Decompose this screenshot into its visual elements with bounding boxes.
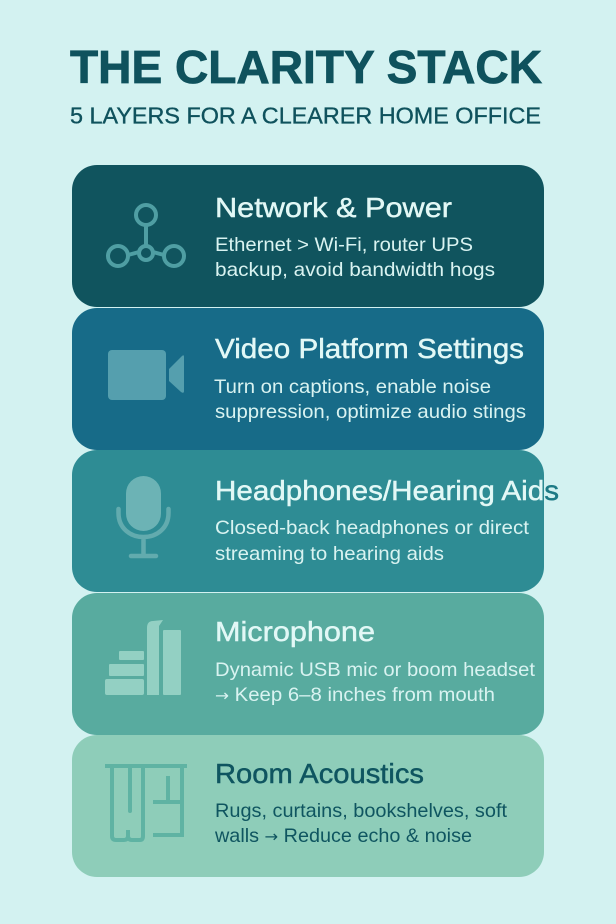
panel: headphones and hearing aids bbox=[72, 450, 559, 592]
description: room acoustics bbox=[214, 800, 508, 847]
description: room acoustics: walls → Reduce echo & noise bbox=[214, 825, 472, 847]
description: microphone: Dynamic USB mic or boom headset bbox=[215, 659, 536, 681]
icon: network nodes bbox=[108, 205, 184, 266]
description: headphones and hearing aids: Closed-back headphones or direct bbox=[215, 517, 530, 539]
heading: headphones and hearing aids: Headphones/Hearing Aids bbox=[215, 475, 559, 506]
icon: room layout bbox=[105, 766, 187, 840]
description: headphones and hearing aids: streaming to hearing aids bbox=[215, 543, 444, 565]
description: network and power: Ethernet > Wi-Fi, router UPS bbox=[215, 234, 473, 256]
description: microphone: → Keep 6–8 inches from mouth bbox=[215, 684, 495, 706]
description: video platform settings: suppression, optimize audio stings bbox=[215, 401, 526, 423]
panel: network and power bbox=[72, 165, 544, 307]
icon: video camera bbox=[108, 350, 184, 400]
heading: network and power: Network & Power bbox=[215, 192, 452, 223]
heading: room acoustics: Room Acoustics bbox=[215, 758, 424, 789]
heading: video platform settings: Video Platform Settings bbox=[215, 333, 524, 364]
icon: books on a shelf bbox=[105, 620, 181, 695]
panel: microphone bbox=[72, 593, 544, 735]
description: video platform settings: Turn on captions, enable noise bbox=[214, 376, 491, 398]
heading: microphone: Microphone bbox=[215, 616, 375, 647]
panel: video platform settings bbox=[72, 308, 544, 450]
description: network and power: backup, avoid bandwidth hogs bbox=[215, 259, 495, 281]
heading: headphones and hearing aids: Headphones/Hearing Aids bbox=[215, 475, 559, 506]
icon: microphone bbox=[118, 476, 168, 556]
description: video platform settings bbox=[214, 376, 526, 423]
description: headphones and hearing aids bbox=[215, 517, 530, 565]
description: microphone bbox=[215, 659, 536, 706]
subtitle: 5 LAYERS FOR A CLEARER HOME OFFICE bbox=[70, 102, 541, 128]
description: room acoustics: Rugs, curtains, bookshelves, soft bbox=[215, 800, 508, 822]
panel: room acoustics bbox=[72, 735, 544, 877]
title: THE CLARITY STACK bbox=[70, 41, 542, 93]
description: network and power bbox=[215, 234, 495, 281]
